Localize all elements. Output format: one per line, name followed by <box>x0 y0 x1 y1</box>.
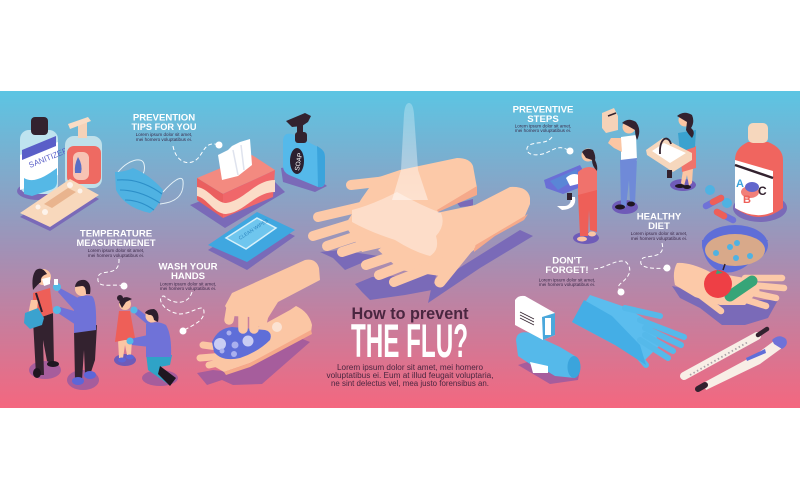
lower palm hand <box>200 306 312 375</box>
upper hand <box>225 260 320 329</box>
heading: preventive steps <box>513 104 574 133</box>
dashed connector: healthy diet <box>641 243 670 272</box>
icon: mercury thermometer <box>684 329 767 376</box>
heading: don't forget: Lorem ipsum dolor sit amet, <box>539 278 595 282</box>
heading: healthy diet: DIET <box>648 221 670 232</box>
icon: pills <box>705 185 733 220</box>
illustration: woman at purple sink <box>544 148 599 244</box>
title block: How to prevent <box>352 305 469 323</box>
heading: prevention tips: Lorem ipsum dolor sit amet, <box>136 132 192 137</box>
heading: wash your hands: HANDS <box>171 271 206 282</box>
apple <box>704 270 732 298</box>
title block <box>326 305 494 388</box>
illustration: central hands with sanitizer <box>313 103 533 303</box>
icon: blue wet wipes: CLEAN WIPES <box>238 218 270 242</box>
illustration: woman at dryer <box>602 108 639 214</box>
illustration: girl being measured <box>114 295 136 366</box>
icon: sanitizer bottle <box>17 117 70 200</box>
background panel <box>0 91 800 408</box>
back hand <box>313 158 477 252</box>
dashed connector: wash hands <box>161 292 204 334</box>
heading: preventive steps: PREVENTIVE <box>513 104 574 116</box>
dashed connector: preventive steps <box>527 137 574 155</box>
dashed connector: temperature <box>98 259 128 290</box>
icon: digital thermometer <box>698 336 787 390</box>
heading: don't forget: DON'T <box>552 256 582 266</box>
heading: temperature measurement: TEMPERATURE <box>80 228 153 240</box>
heading: preventive steps: mei homero voluptatibus ei. <box>515 128 571 133</box>
icon: soap dispenser: SOAP <box>294 152 304 171</box>
icon: wipes pack beige <box>20 179 99 231</box>
title block: Lorem ipsum dolor sit amet, mei homero <box>337 363 484 372</box>
icon: medicine bottle: A <box>736 178 744 190</box>
heading: prevention tips: PREVENTION <box>133 112 195 124</box>
dashed connector: don't forget <box>594 261 630 296</box>
illustration: man with thermometer <box>53 279 99 390</box>
dashed connector: prevention tips <box>173 142 222 163</box>
food bowl <box>702 225 768 272</box>
icon: infrared thermometer in glove <box>515 296 580 384</box>
heading: temperature measurement: mei homero voluptatibus ei. <box>88 253 144 258</box>
illustration: kneeling father <box>126 306 178 386</box>
hands shadow <box>320 199 533 303</box>
heading: don't forget: mei homero voluptatibus ei. <box>539 282 595 287</box>
heading: healthy diet: mei homero voluptatibus ei. <box>631 236 687 241</box>
icon: tissue box <box>190 139 285 228</box>
heading: wash your hands: Lorem ipsum dolor sit amet, <box>160 282 216 286</box>
icon: blue gloves <box>572 295 684 365</box>
icon: sanitizer bottle: SANITIZER <box>27 146 70 170</box>
icon: face mask <box>115 160 183 213</box>
heading: temperature measurement <box>76 228 156 258</box>
heading: prevention tips <box>132 112 197 142</box>
heading: temperature measurement: Lorem ipsum dolor sit amet, <box>88 248 144 253</box>
heading: preventive steps: STEPS <box>527 114 559 125</box>
icon: pump bottle <box>65 117 102 188</box>
icon: blue wet wipes <box>208 212 295 270</box>
illustration: woman at beige sink <box>646 113 696 191</box>
soap bar <box>212 322 282 359</box>
heading: wash your hands <box>158 262 218 291</box>
illustration: temperature check on woman <box>24 269 61 379</box>
heading: prevention tips: TIPS FOR YOU <box>132 122 197 133</box>
icon: medicine bottle <box>733 123 787 222</box>
icon: soap dispenser <box>281 113 327 192</box>
heading: don't forget: FORGET! <box>545 265 589 276</box>
illustration: hands with soap <box>197 260 320 385</box>
icon: medicine bottle: C <box>758 184 767 198</box>
heading: don't forget <box>539 256 595 287</box>
heading: wash your hands: mei homero voluptatibus ei. <box>160 286 216 291</box>
sanitizer stream <box>392 103 428 200</box>
heading: prevention tips: mei homero voluptatibus ei. <box>136 137 192 142</box>
front hand <box>366 187 530 282</box>
open hand <box>674 263 784 311</box>
heading: healthy diet: HEALTHY <box>637 212 682 222</box>
heading: wash your hands: WASH YOUR <box>158 262 218 272</box>
heading: healthy diet <box>631 212 687 241</box>
icon: medicine bottle: B <box>743 194 751 206</box>
title block: voluptatibus ei. Eum at illud feugait voluptaria, <box>326 371 494 380</box>
shadow under soap hand <box>197 338 310 385</box>
illustration: hand with bowl and fruit <box>672 225 784 325</box>
heading: temperature measurement: MEASUREMENET <box>76 238 156 249</box>
heading: preventive steps: Lorem ipsum dolor sit amet, <box>515 124 571 128</box>
cucumber <box>730 281 752 296</box>
title block: ne sint delectus vel, mea justo forensibus an. <box>331 379 489 388</box>
hand shadow <box>672 286 778 325</box>
sanitizer splash <box>352 192 443 256</box>
heading: healthy diet: Lorem ipsum dolor sit amet, <box>631 231 687 236</box>
title block: THE FLU? <box>351 314 468 367</box>
